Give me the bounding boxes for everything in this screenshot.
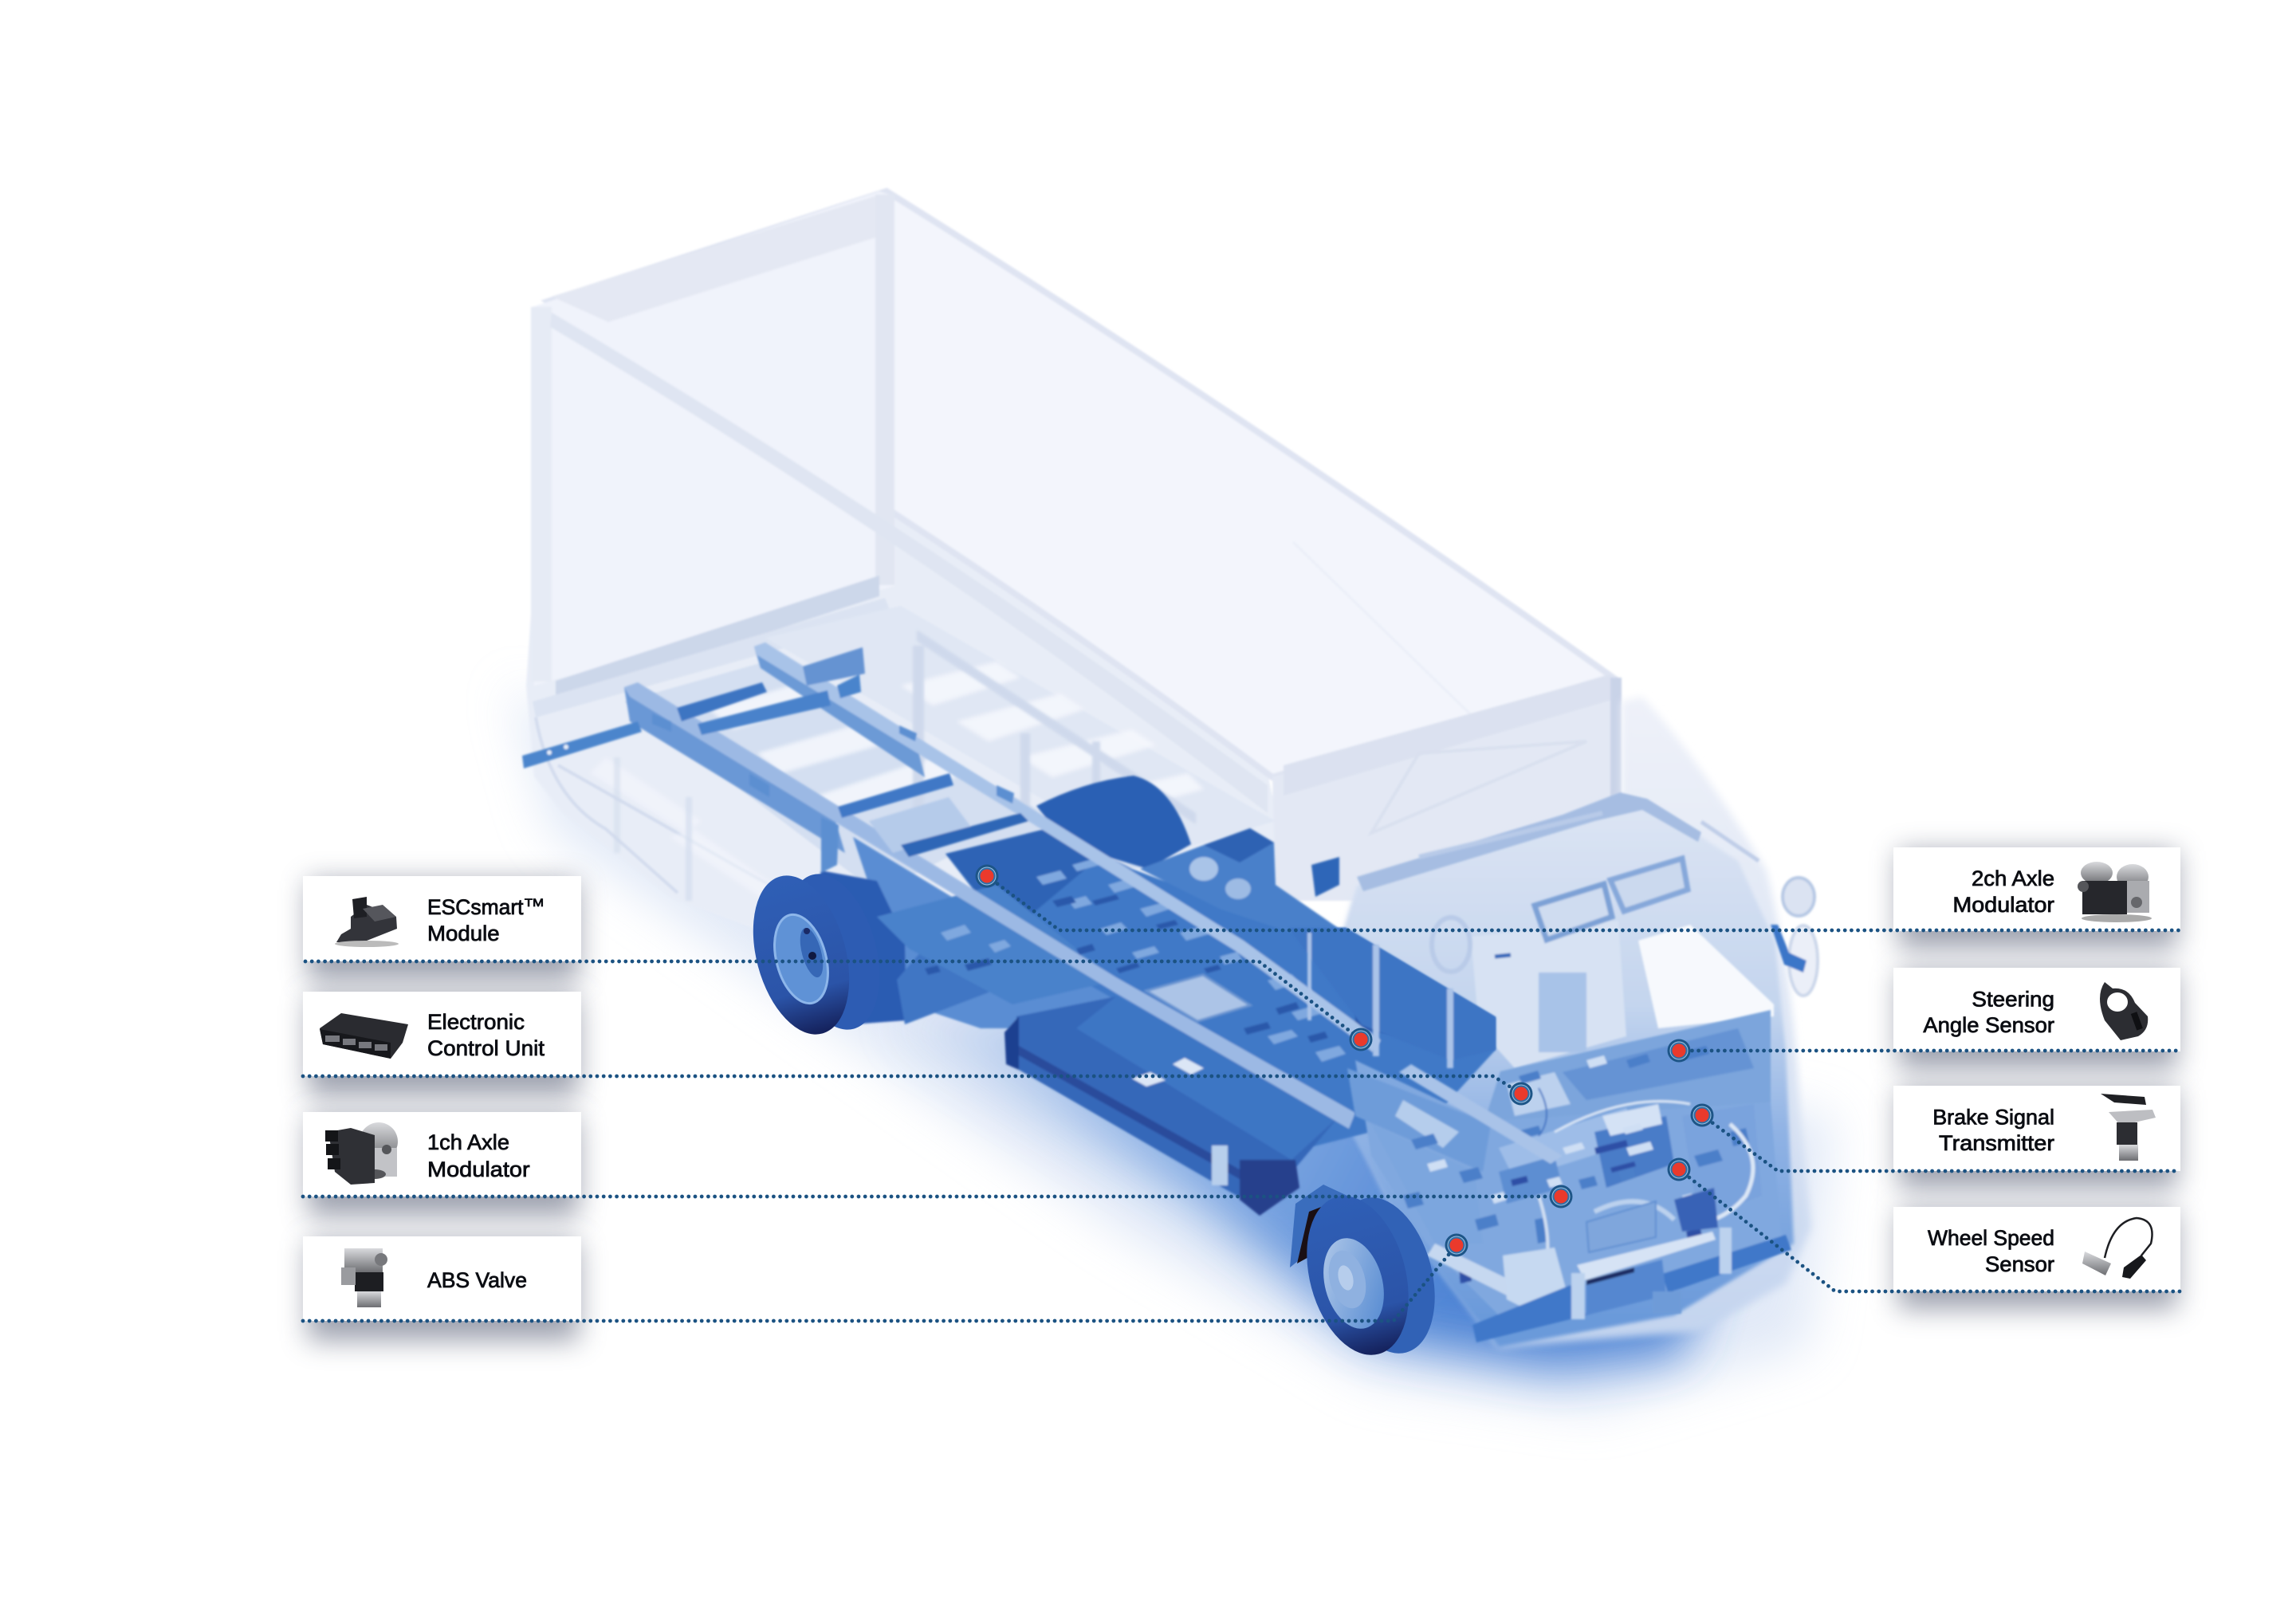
marker: ESCsmart module	[976, 864, 998, 888]
marker: 1ch modulator	[1550, 1185, 1572, 1208]
card: ESCsmart Module	[303, 876, 581, 980]
card: Wheel Speed Sensor: Wheel Speed	[1928, 1226, 2054, 1250]
icon: control unit	[320, 1013, 408, 1059]
rear fender	[813, 870, 906, 1024]
floor slats	[590, 662, 1204, 901]
cross beam	[1577, 1232, 1716, 1280]
cab ghost	[1307, 697, 1818, 1347]
cab roof bar	[1357, 792, 1701, 891]
engine detail specks	[1403, 1046, 1749, 1244]
marker: ESC line	[1349, 1028, 1373, 1051]
far rail web	[754, 643, 925, 777]
rear posts	[875, 195, 894, 585]
windows	[1638, 925, 1774, 1028]
roof panel	[548, 191, 1612, 777]
floor between rails	[624, 662, 1148, 893]
card: 2ch Axle Modulator: Modulator	[1952, 893, 2054, 917]
marker: wheel speed sensor	[1668, 1157, 1690, 1181]
under-rail filler	[853, 837, 1116, 1028]
marker: ABS valve	[1445, 1234, 1468, 1256]
card: Wheel Speed Sensor	[1893, 1207, 2180, 1309]
cab pillar stripes	[1399, 1064, 1563, 1164]
box front post	[1610, 678, 1622, 813]
bed detail specks	[941, 859, 1346, 1062]
radiator	[1586, 1201, 1656, 1252]
rear top band	[552, 196, 875, 322]
card: Electronic Control Unit: Electronic	[427, 1010, 525, 1034]
skirt outlines	[536, 717, 1020, 1028]
card: 1ch Axle Modulator	[303, 1112, 581, 1216]
box front face	[1272, 677, 1622, 901]
card: 1ch Axle Modulator: Modulator	[427, 1157, 530, 1181]
engine compartment	[1355, 1060, 1782, 1315]
cab outer shell	[1315, 697, 1811, 1347]
rear tire	[771, 863, 895, 1040]
icon: ABS valve	[341, 1248, 387, 1307]
module block	[946, 827, 1096, 915]
chassis	[522, 643, 1496, 1216]
card: 1ch Axle Modulator: 1ch Axle	[427, 1130, 509, 1154]
marker: brake transmitter	[1690, 1103, 1714, 1127]
bumper	[1472, 1235, 1791, 1342]
icon: ESCsmart module	[335, 897, 399, 947]
icon: brake transmitter	[2101, 1094, 2156, 1161]
card: Electronic Control Unit: Control Unit	[427, 1036, 545, 1060]
rear panel	[533, 191, 894, 686]
card: Steering Angle Sensor: Angle Sensor	[1923, 1013, 2054, 1037]
card: ABS Valve	[303, 1236, 581, 1341]
rear crossbar	[522, 721, 642, 768]
ground shadow	[510, 686, 1834, 1411]
near rail web	[624, 687, 845, 853]
icon: wheel speed sensor	[2082, 1218, 2152, 1279]
rear wheel	[737, 863, 895, 1045]
card: ESCsmart Module: Module	[427, 922, 500, 945]
marker: steering sensor	[1668, 1039, 1690, 1062]
side under-roof band	[550, 312, 1268, 813]
rear-mid box	[897, 929, 997, 1024]
brackets	[1571, 1273, 1585, 1319]
card: ABS Valve: ABS Valve	[427, 1268, 527, 1292]
compressor group	[1140, 828, 1339, 933]
leader lines	[303, 876, 2180, 1321]
icon: steering sensor	[2100, 982, 2148, 1040]
card: 2ch Axle Modulator: 2ch Axle	[1972, 867, 2054, 890]
air dryer	[1503, 1248, 1567, 1315]
air tank	[869, 797, 973, 853]
card: Steering Angle Sensor: Steering	[1972, 987, 2054, 1011]
rear lower rail	[556, 576, 879, 701]
card: ESCsmart Module: ESCsmart	[427, 895, 524, 919]
card: Brake Signal Transmitter: Transmitter	[1939, 1131, 2054, 1155]
wheel arch	[1290, 1185, 1347, 1267]
near rail flange	[624, 682, 1355, 1129]
dashboard band	[1484, 1010, 1771, 1122]
mirrors	[1771, 878, 1818, 996]
front wheel	[1290, 1185, 1451, 1366]
box body	[526, 191, 1622, 1068]
bracket tabs	[652, 713, 1014, 873]
chassis bed	[946, 827, 1496, 1148]
card: Brake Signal Transmitter	[1893, 1086, 2180, 1189]
rear cab dark wall	[1288, 928, 1496, 1060]
front hub	[1314, 1232, 1394, 1335]
skirt	[526, 303, 1307, 1068]
cab body	[1307, 801, 1794, 1347]
battery pack	[1016, 996, 1339, 1200]
battery labels	[1132, 1072, 1166, 1087]
icon: 2ch modulator	[2078, 862, 2152, 922]
marker: control unit	[1510, 1083, 1532, 1105]
truck illustration	[510, 191, 1834, 1411]
card: Electronic Control Unit	[303, 992, 581, 1096]
card: ESCsmart Module: TM	[525, 896, 544, 909]
card: 2ch Axle Modulator	[1893, 847, 2180, 949]
card: Wheel Speed Sensor: Sensor	[1985, 1252, 2054, 1276]
front tire	[1320, 1186, 1451, 1365]
fuel tank	[1036, 776, 1191, 869]
cross tubes	[677, 682, 767, 721]
lower cab engine bay	[1288, 928, 1791, 1342]
icon: 1ch modulator	[325, 1122, 398, 1185]
pale top plate	[1146, 975, 1250, 1021]
card: Steering Angle Sensor	[1893, 968, 2180, 1069]
far rail flange	[754, 643, 1381, 1052]
card: Brake Signal Transmitter: Brake Signal	[1932, 1105, 2054, 1129]
rear hub	[765, 909, 837, 1009]
